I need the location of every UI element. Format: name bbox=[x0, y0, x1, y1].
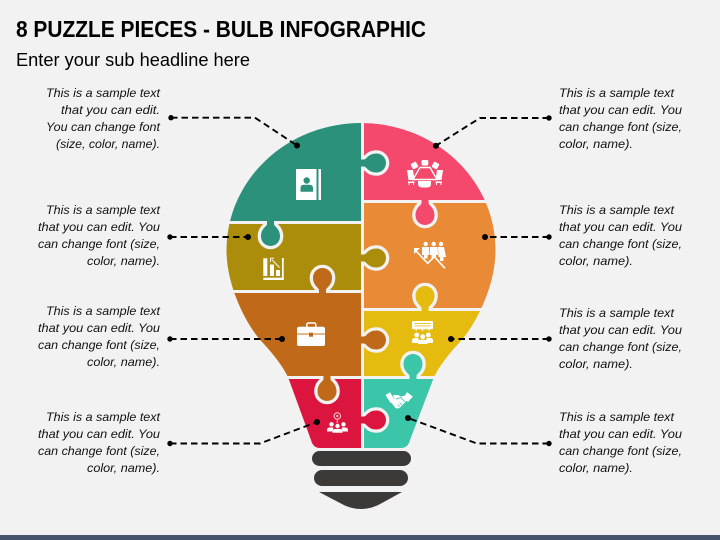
icon: handshake bbox=[386, 392, 413, 408]
text block: right 3 bbox=[559, 306, 682, 371]
icon: presentation board with people bbox=[412, 321, 433, 344]
text block: left 2: that you can edit. You bbox=[38, 220, 160, 234]
leader line: left 2 bbox=[167, 234, 251, 240]
text block: left 3: that you can edit. You bbox=[38, 321, 160, 335]
text block: left 4: can change font (size, bbox=[38, 444, 160, 458]
footer bar bbox=[0, 535, 720, 540]
leader line: right 1 bbox=[433, 115, 552, 149]
text block: right 4: This is a sample text bbox=[559, 410, 675, 424]
text block: right 1: can change font (size, bbox=[559, 120, 682, 134]
text block: right 4: that you can edit. You bbox=[559, 427, 682, 441]
icon: conference table bbox=[407, 160, 443, 188]
leader line: left 1 bbox=[168, 115, 300, 148]
text block: left 3: color, name). bbox=[87, 355, 160, 369]
text block: left 2: This is a sample text bbox=[46, 203, 161, 217]
puzzle tabs bbox=[261, 154, 434, 430]
text block: left 3: This is a sample text bbox=[46, 304, 161, 318]
text block: left 4: color, name). bbox=[87, 461, 160, 475]
text block: left 4: that you can edit. You bbox=[38, 427, 160, 441]
text block: right 2: that you can edit. You bbox=[559, 220, 682, 234]
text block: right 4: color, name). bbox=[559, 461, 633, 475]
subtitle: Enter your sub headline here bbox=[16, 50, 250, 70]
text block: right 2: color, name). bbox=[559, 254, 633, 268]
text block: right 1: that you can edit. You bbox=[559, 103, 682, 117]
text block: left 1 bbox=[46, 86, 161, 151]
leader line: right 3 bbox=[448, 336, 552, 342]
bulb puzzle bbox=[220, 115, 504, 449]
text block: left 4: This is a sample text bbox=[46, 410, 161, 424]
text block: left 2: can change font (size, bbox=[38, 237, 160, 251]
text block: left 4 bbox=[38, 410, 161, 475]
leader line: left 4 bbox=[167, 419, 320, 446]
text block: right 4 bbox=[559, 410, 682, 475]
text block: right 1: This is a sample text bbox=[559, 86, 675, 100]
text block: left 1: You can change font bbox=[46, 120, 161, 134]
leader line: left 3 bbox=[167, 336, 285, 342]
icon: briefcase bbox=[297, 323, 325, 346]
text block: left 3: can change font (size, bbox=[38, 338, 160, 352]
text block: right 3: that you can edit. You bbox=[559, 323, 682, 337]
text block: right 2: can change font (size, bbox=[559, 237, 682, 251]
text block: right 2 bbox=[559, 203, 682, 268]
leader line: right 2 bbox=[482, 234, 552, 240]
text block: left 3 bbox=[38, 304, 161, 369]
text block: right 2: This is a sample text bbox=[559, 203, 675, 217]
text block: left 2: color, name). bbox=[87, 254, 160, 268]
bulb base bbox=[312, 451, 411, 509]
icon: people with trend arrow bbox=[414, 242, 446, 268]
icon: contact book bbox=[296, 169, 321, 200]
text block: left 1: This is a sample text bbox=[46, 86, 161, 100]
text block: right 1 bbox=[559, 86, 682, 151]
icon: bar chart bbox=[263, 258, 284, 280]
text block: right 3: This is a sample text bbox=[559, 306, 675, 320]
text block: right 4: can change font (size, bbox=[559, 444, 682, 458]
text block: left 1: (size, color, name). bbox=[56, 137, 160, 151]
title: 8 PUZZLE PIECES - BULB INFOGRAPHIC bbox=[16, 16, 426, 42]
text block: left 2 bbox=[38, 203, 161, 268]
icon: location pin with team bbox=[327, 413, 348, 433]
leader line: right 4 bbox=[405, 415, 552, 446]
text block: right 3: can change font (size, bbox=[559, 340, 682, 354]
text block: left 1: that you can edit. bbox=[61, 103, 160, 117]
puzzle piece bodies bbox=[220, 115, 504, 449]
text block: right 1: color, name). bbox=[559, 137, 633, 151]
text block: right 3: color, name). bbox=[559, 357, 633, 371]
